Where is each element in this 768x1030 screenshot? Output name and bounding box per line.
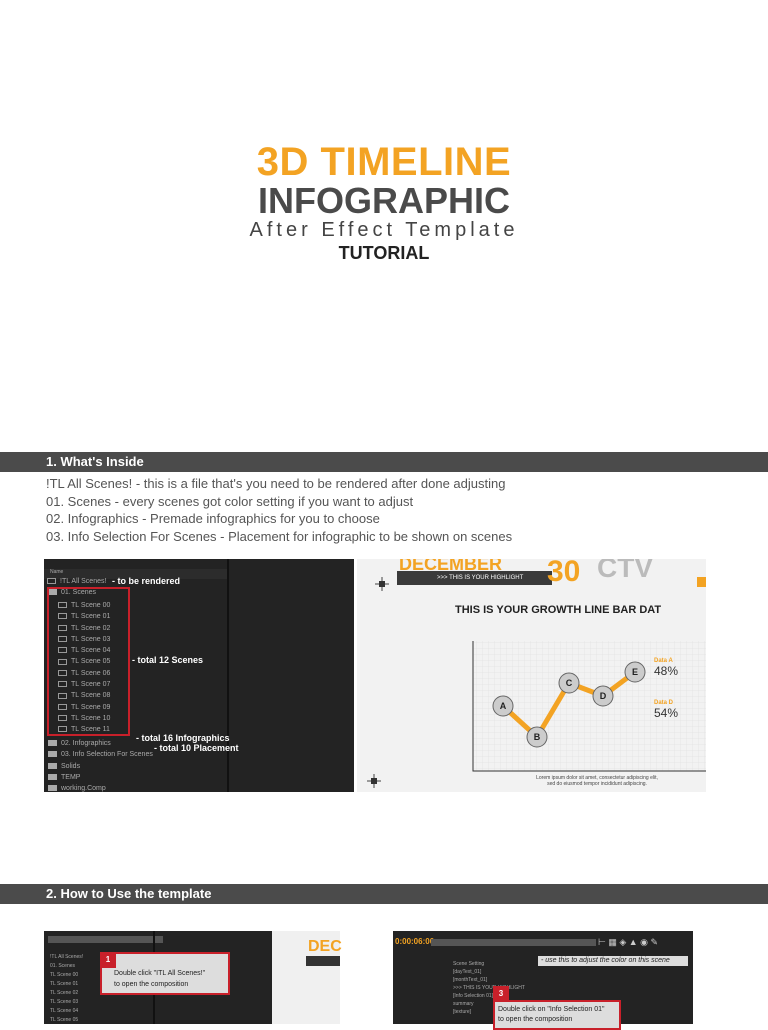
title: 3D TIMELINE	[257, 140, 511, 184]
screenshot: growth chart: 54%	[654, 706, 678, 720]
screenshot: project panel: 02. Infographics	[61, 740, 111, 747]
text block: contents: 03. Info Selection For Scenes - Placement for infographic to be shown on scenes	[46, 528, 512, 544]
screenshot: project panel: TL Scene 05	[71, 658, 110, 665]
screenshot: project panel: TL Scene 04	[71, 647, 110, 654]
screenshot: project panel: 01. Scenes	[61, 589, 96, 596]
screenshot: growth chart: Lorem ipsum dolor sit amet, consectetur adipiscing elit,	[536, 775, 658, 781]
text block: contents: 01. Scenes - every scenes got color setting if you want to adjust	[46, 494, 413, 508]
screenshot: growth chart: THIS IS YOUR GROWTH LINE BAR DAT	[455, 604, 661, 616]
screenshot: growth chart: A	[500, 701, 507, 711]
callout: step 1: Double click "ITL All Scenes!"	[114, 970, 205, 977]
screenshot: step 3 timeline: [texture]	[453, 1009, 471, 1015]
screenshot: project panel: 03. Info Selection For Scenes	[61, 751, 153, 758]
screenshot: step 3 timeline: [dayText_01]	[453, 969, 481, 975]
screenshot: step 3 timeline: >>> THIS IS YOUR HIGHLIGHT	[453, 985, 525, 991]
callout: step 1	[100, 952, 230, 995]
screenshot: project panel: TL Scene 08	[71, 692, 110, 699]
screenshot: step 3 timeline: summary	[453, 1001, 474, 1007]
screenshot: step 3 timeline: 0:00:06:00	[395, 937, 434, 946]
screenshot: step 1: !TL All Scenes!	[50, 954, 83, 960]
screenshot: step 3 timeline: Scene Setting	[453, 961, 484, 967]
screenshot: step 1: TL Scene 02	[50, 990, 78, 996]
screenshot: step 3 timeline	[393, 931, 693, 1024]
screenshot: step 1: TL Scene 00	[50, 972, 78, 978]
callout: step 1: to open the composition	[114, 981, 188, 988]
screenshot: growth chart: D	[600, 691, 607, 701]
screenshot: growth chart: B	[534, 732, 541, 742]
screenshot: growth chart: Data A	[654, 658, 673, 664]
screenshot: preview: DEC	[308, 938, 342, 955]
screenshot: project panel: TEMP	[61, 774, 80, 781]
screenshot: step 1: 01. Scenes	[50, 963, 75, 969]
screenshot: step 1: TL Scene 03	[50, 999, 78, 1005]
screenshot: project panel: !TL All Scenes!	[60, 578, 106, 585]
text block: contents: 02. Infographics - Premade infographics for you to choose	[46, 511, 380, 526]
screenshot: step 3 timeline: 3	[499, 989, 503, 998]
screenshot: growth chart: C	[566, 678, 573, 688]
screenshot: growth chart: sed do eiusmod tempor incididunt adipiscing.	[547, 781, 647, 787]
screenshot: step 1: TL Scene 05	[50, 1017, 78, 1023]
callout: step 3	[493, 1000, 621, 1030]
screenshot: preview	[272, 931, 340, 1024]
screenshot: project panel: Solids	[61, 763, 80, 770]
screenshot: project panel	[44, 559, 354, 792]
screenshot: project panel: - total 10 Placement	[154, 743, 239, 753]
text block: contents	[46, 476, 512, 544]
callout: step 1: 1	[106, 955, 110, 964]
screenshot: project panel: TL Scene 02	[71, 625, 110, 632]
screenshot: project panel: TL Scene 09	[71, 704, 110, 711]
screenshot: project panel: - to be rendered	[112, 576, 180, 586]
section heading 2	[0, 884, 768, 904]
screenshot: project panel: TL Scene 01	[71, 613, 110, 620]
screenshot: growth chart: >>> THIS IS YOUR HIGHLIGHT	[437, 575, 523, 581]
screenshot: project panel: working.Comp	[61, 785, 106, 792]
screenshot: project panel: TL Scene 11	[71, 726, 110, 733]
callout: step 3: to open the composition	[498, 1016, 572, 1023]
screenshot: step 1: TL Scene 04	[50, 1008, 78, 1014]
screenshot: growth chart: E	[632, 667, 638, 677]
screenshot: project panel: TL Scene 03	[71, 636, 110, 643]
screenshot: step 3 timeline: [Info Selection 01]	[453, 993, 493, 999]
callout: step 3: Double click on "Info Selection 01"	[498, 1006, 605, 1013]
screenshot: project panel: TL Scene 06	[71, 670, 110, 677]
screenshot: step 3 timeline: - use this to adjust the color on this scene	[541, 957, 670, 964]
screenshot: step 3 timeline: [monthText_01]	[453, 977, 487, 983]
screenshot: step 1	[44, 931, 272, 1024]
title: After Effect Template	[250, 219, 518, 241]
section heading 2: 2. How to Use the template	[46, 886, 211, 901]
screenshot: project panel: Name	[50, 569, 63, 575]
title: INFOGRAPHIC	[258, 180, 510, 221]
screenshot: project panel: TL Scene 07	[71, 681, 110, 688]
callout: red box	[47, 587, 130, 736]
screenshot: growth chart: Data D	[654, 700, 674, 706]
screenshot: growth chart: 48%	[654, 664, 678, 678]
title: TUTORIAL	[339, 243, 429, 263]
title	[250, 140, 518, 263]
screenshot: project panel: - total 12 Scenes	[132, 655, 203, 665]
section heading 1: 1. What's Inside	[46, 454, 144, 469]
section heading 1	[0, 452, 768, 472]
screenshot: growth chart	[357, 559, 706, 792]
screenshot: project panel: - total 16 Infographics	[136, 733, 230, 743]
text block: contents: !TL All Scenes! - this is a file that's you need to be rendered after done adjusting	[46, 476, 505, 491]
screenshot: project panel: TL Scene 10	[71, 715, 110, 722]
screenshot: step 3 timeline: ⊢ ▦ ◈ ▲ ◉ ✎	[598, 937, 658, 947]
screenshot: step 1: TL Scene 01	[50, 981, 78, 987]
screenshot: project panel: TL Scene 00	[71, 602, 110, 609]
